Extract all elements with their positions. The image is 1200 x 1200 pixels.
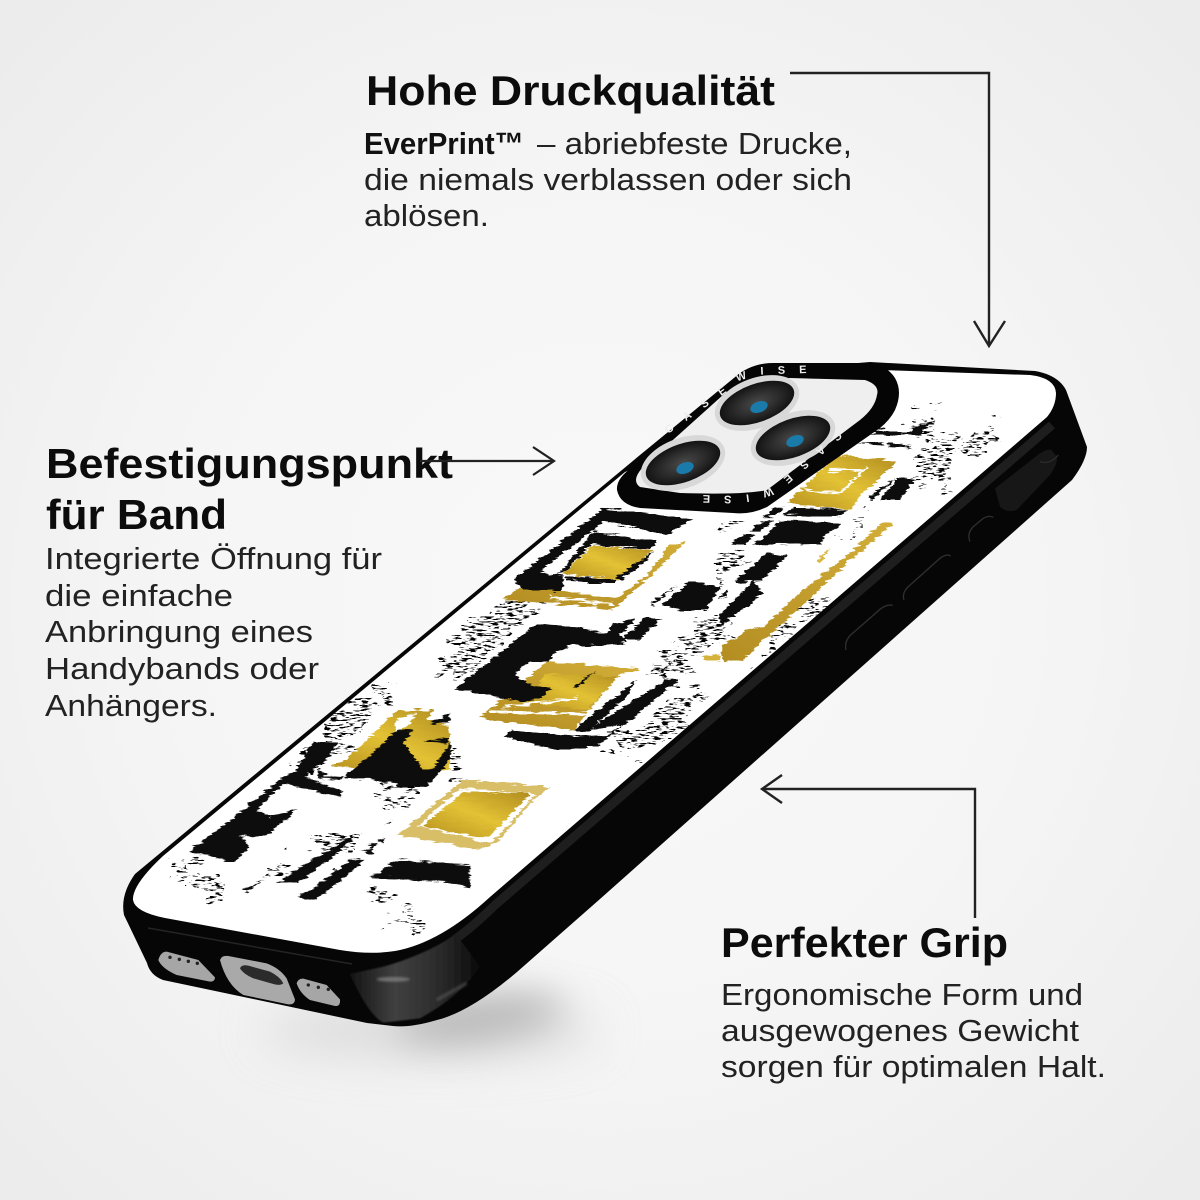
body text: [721, 977, 1106, 1084]
camera window: [636, 378, 878, 494]
gold squares and streak: [330, 455, 897, 850]
heading: für Band: [46, 491, 227, 538]
body text: Anhängers.: [45, 688, 217, 723]
lens left: [633, 424, 733, 502]
gold: upper right square: [720, 455, 897, 662]
lower corner highlight: [350, 935, 480, 1023]
callout: strap attachment: [45, 440, 453, 723]
side edge band: [425, 425, 1052, 958]
callout: print quality: [364, 67, 852, 233]
body text: ausgewogenes Gewicht: [721, 1013, 1079, 1048]
gold: square four: [397, 780, 550, 850]
bottom seam: [148, 928, 352, 964]
speaker grille right: [297, 979, 340, 1006]
callout: grip: [721, 919, 1106, 1084]
phone shadow: [260, 984, 600, 1056]
body text: Handybands oder: [45, 651, 319, 686]
body text: Anbringung eines: [45, 614, 313, 649]
camera ring: [617, 363, 899, 513]
case body: [123, 362, 1087, 1026]
body text: [364, 126, 852, 233]
body text: Integrierte Öffnung für: [45, 541, 382, 576]
heading: Befestigungspunkt: [46, 440, 453, 487]
body text: sorgen für optimalen Halt.: [721, 1049, 1106, 1084]
body text: die niemals verblassen oder sich: [364, 162, 852, 197]
body text: ablösen.: [364, 198, 489, 233]
speckled grit texture: [170, 410, 1000, 927]
bottom details: [158, 935, 480, 1023]
side buttons: [846, 516, 993, 650]
gold: square three: [330, 710, 450, 772]
strap attachment slot: [995, 450, 1058, 511]
heading: Hohe Druckqualität: [366, 67, 775, 114]
gold: square two: [478, 540, 720, 730]
body text: EverPrint™: [364, 126, 524, 161]
arrow: strap attachment: [420, 447, 554, 475]
phone case: [123, 362, 1087, 1026]
black brush strokes: [188, 420, 933, 900]
back panel artwork: [133, 370, 1056, 953]
speaker grille left: [158, 952, 215, 982]
ring brand text bottom: CASEWISE: [703, 434, 842, 504]
heading: [46, 440, 453, 538]
heading: Perfekter Grip: [721, 919, 1008, 966]
arrow: print quality: [790, 73, 1005, 346]
arrow: grip: [762, 775, 975, 918]
lens right: [743, 399, 843, 477]
lens top: [707, 364, 807, 442]
body text: – abriebfeste Drucke,: [537, 126, 852, 161]
ring brand text top: CASEWISE: [666, 366, 806, 432]
charging port: [220, 956, 295, 1004]
body text: Ergonomische Form und: [721, 977, 1083, 1012]
body text: die einfache: [45, 578, 233, 613]
body text: [45, 541, 382, 723]
